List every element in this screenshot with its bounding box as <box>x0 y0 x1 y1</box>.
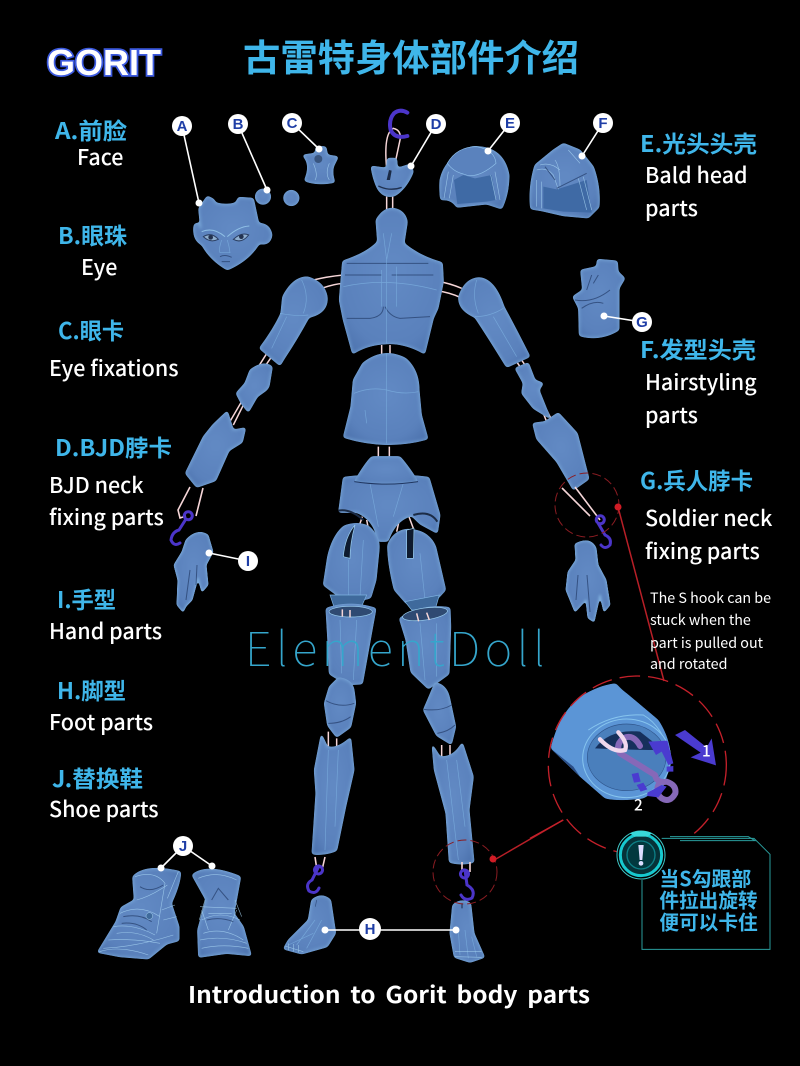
part: BJD neck fixing <box>371 111 413 196</box>
badge A: A <box>177 118 188 135</box>
label H: H.脚型 <box>57 672 126 706</box>
label I: Hand parts <box>49 615 162 646</box>
badge D: D <box>431 116 442 133</box>
badge E: E <box>505 115 515 132</box>
badge F: F <box>598 115 608 132</box>
callout leader lines and dots <box>158 123 642 934</box>
label D: fixing parts <box>49 501 164 532</box>
label G: fixing parts <box>645 535 760 566</box>
badge I: I <box>246 553 250 570</box>
part: left hand <box>174 532 213 612</box>
part: left forearm lower <box>185 411 246 487</box>
number 2: 2 <box>634 794 643 816</box>
label F: parts <box>645 399 698 430</box>
part: right shoulder and upper arm <box>459 278 530 367</box>
part: eye fixation <box>303 147 338 184</box>
HUD alert icon <box>617 831 665 879</box>
bottom caption: Introduction to Gorit body parts <box>188 976 590 1010</box>
part cylinder <box>551 683 671 800</box>
boots and feet <box>97 868 485 962</box>
part: pelvis dome <box>354 457 418 484</box>
part: face <box>194 196 272 270</box>
HUD note box: 便可以卡住 <box>659 906 758 935</box>
hook: right ankle <box>460 870 473 899</box>
connector stub <box>530 820 563 838</box>
hook: left wrist <box>171 512 192 544</box>
part: bald head shell <box>440 147 509 209</box>
badge F <box>593 113 613 133</box>
arrow 1 <box>675 730 716 765</box>
part: right knee <box>423 683 456 745</box>
part: left lower leg <box>312 734 354 854</box>
badge G <box>632 312 652 332</box>
badge A <box>172 116 192 136</box>
part: eyeballs <box>255 189 299 206</box>
red connector lines <box>490 504 664 862</box>
upper body parts <box>185 111 625 490</box>
S hook purple <box>618 737 675 800</box>
part: left knee <box>324 678 356 737</box>
badge J: J <box>179 838 187 855</box>
badge B: B <box>233 116 244 133</box>
badge H <box>359 918 381 940</box>
part: right shoe <box>192 869 251 957</box>
label E: parts <box>645 192 698 223</box>
label A: A.前脸 <box>54 112 127 146</box>
label C: Eye fixations <box>49 352 179 383</box>
hook: right wrist <box>596 516 610 548</box>
arrow 2: rotation <box>632 741 673 797</box>
label F: Hairstyling <box>645 366 757 397</box>
badge C: C <box>287 115 298 132</box>
part: left shoe <box>97 868 181 959</box>
label C: C.眼卡 <box>58 312 124 346</box>
note: S hook explanation: part is pulled out <box>650 632 764 653</box>
part: right forearm upper <box>515 363 551 419</box>
part: left upper shin <box>326 604 376 685</box>
label B <box>58 217 127 282</box>
HUD note box: 件拉出旋转 <box>659 885 758 914</box>
part: left thigh <box>323 523 379 601</box>
note: S hook explanation <box>650 587 771 674</box>
part: right thigh <box>388 528 446 604</box>
part: right foot <box>450 901 485 962</box>
label C <box>49 312 179 383</box>
label B: B.眼珠 <box>58 217 127 251</box>
badge H: H <box>365 921 375 938</box>
label E: Bald head <box>645 159 748 190</box>
HUD note box <box>642 837 770 949</box>
label J <box>49 760 159 824</box>
label A: Face <box>77 141 123 172</box>
part: hairstyle shell <box>530 143 599 218</box>
logo: GORIT: GORIT <box>47 42 161 83</box>
part: torso <box>339 208 443 354</box>
badge G: G <box>636 314 648 331</box>
part: right upper shin <box>399 605 451 689</box>
dashed detail circle <box>548 676 726 854</box>
part: right forearm lower <box>533 413 589 490</box>
badge I <box>238 551 258 571</box>
detail markers: red dashed circles <box>433 473 619 904</box>
badge D <box>426 114 446 134</box>
label E: E.光头头壳 <box>640 125 757 159</box>
part: left foot <box>283 896 336 954</box>
note: S hook explanation: and rotated <box>650 653 727 674</box>
watermark: ElementDoll: ElementDoll <box>245 611 545 680</box>
note: S hook explanation: stuck when the <box>650 609 751 630</box>
letter badges <box>172 113 652 940</box>
detail view: S hook enlarged <box>530 676 770 949</box>
wires: hips and knees <box>328 515 450 757</box>
part: left shoulder and upper arm <box>259 277 327 366</box>
label F: F.发型头壳 <box>640 331 756 365</box>
S hooks and hands <box>171 487 610 899</box>
label G <box>640 462 773 566</box>
label I <box>49 581 162 646</box>
part: right hand <box>566 541 610 622</box>
label J: J.替换鞋 <box>52 760 143 794</box>
part: right knee joint top <box>405 595 439 610</box>
part: soldier neck fixing <box>573 259 625 338</box>
label D: BJD neck <box>49 469 144 500</box>
part: left forearm upper <box>236 364 272 412</box>
S hook pink loop <box>600 732 626 751</box>
label D: D.BJD脖卡 <box>55 429 172 463</box>
lower body parts <box>312 457 474 864</box>
label D <box>49 429 172 532</box>
badge C <box>282 113 302 133</box>
label B: Eye <box>81 251 117 282</box>
wires: shoulders, neck, arms <box>225 197 557 460</box>
label H: Foot parts <box>49 706 153 737</box>
label A <box>54 112 127 172</box>
left labels <box>49 112 179 824</box>
badge J <box>173 836 193 856</box>
title: 古雷特身体部件介绍 <box>243 28 579 82</box>
HUD note box: 当S勾跟部 <box>659 863 751 892</box>
part: right lower leg <box>432 742 474 864</box>
label J: Shoe parts <box>49 793 159 824</box>
label G: G.兵人脖卡 <box>640 462 753 496</box>
label F <box>640 331 757 430</box>
label H <box>49 672 153 737</box>
label I: I.手型 <box>57 581 116 615</box>
badge B <box>228 114 248 134</box>
wires: wrists and ankles <box>178 487 600 872</box>
right labels <box>640 125 773 566</box>
part: left knee joint top <box>330 595 367 610</box>
label G: Soldier neck <box>645 502 773 533</box>
note: S hook explanation: The S hook can be <box>650 587 771 608</box>
part: pelvis <box>338 474 440 541</box>
number 1: 1 <box>702 740 711 762</box>
part: abdomen <box>343 353 428 444</box>
badge E <box>500 113 520 133</box>
label E <box>640 125 757 223</box>
hook: left ankle <box>308 866 322 892</box>
